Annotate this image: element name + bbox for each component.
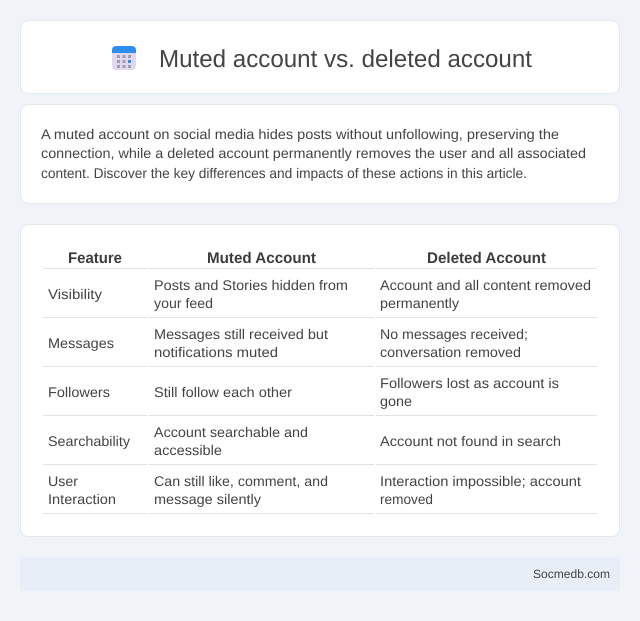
table header: Feature <box>68 250 122 267</box>
title: Muted account vs. deleted account <box>159 46 532 73</box>
row: visibility: permanently <box>380 295 459 311</box>
row: followers: gone <box>380 393 412 409</box>
footer credit: Socmedb.com <box>533 567 610 581</box>
row: user interaction: Interaction <box>48 491 116 507</box>
row: messages: notifications muted <box>154 344 278 360</box>
row: followers <box>48 375 559 409</box>
row: searchability <box>48 424 561 458</box>
row: user interaction <box>48 473 581 507</box>
row: followers: Still follow each other <box>154 384 292 400</box>
footer bar <box>20 557 620 591</box>
row: user interaction: message silently <box>154 491 261 507</box>
row: visibility: your feed <box>154 295 213 311</box>
icon: calendar <box>112 46 136 70</box>
row: messages: conversation removed <box>380 344 521 360</box>
row: visibility <box>48 277 591 311</box>
row: user interaction: User <box>48 473 78 489</box>
row: searchability: accessible <box>154 442 222 458</box>
table header <box>68 250 546 267</box>
row: user interaction: removed <box>380 491 433 507</box>
row: messages <box>48 326 528 360</box>
row: followers: Followers lost as account is <box>380 375 559 391</box>
row: messages: No messages received; <box>380 326 528 342</box>
row: searchability: Searchability <box>48 433 130 449</box>
intro text: connection, while a deleted account permanently removes the user and all associated <box>41 145 586 161</box>
row: messages: Messages still received but <box>154 326 328 342</box>
row: user interaction: Can still like, comment, and <box>154 473 328 489</box>
row: visibility: Posts and Stories hidden from <box>154 277 348 293</box>
table header: Deleted Account <box>427 250 546 267</box>
row: searchability: Account not found in search <box>380 433 561 449</box>
panel: title card <box>20 20 620 94</box>
table header: Muted Account <box>207 250 316 267</box>
intro text: content. Discover the key differences and impacts of these actions in this article. <box>41 165 527 181</box>
panel: introduction <box>20 104 620 204</box>
row: messages: Messages <box>48 335 114 351</box>
intro text: A muted account on social media hides posts without unfollowing, preserving the <box>41 126 559 142</box>
row: visibility: Account and all content removed <box>380 277 591 293</box>
row: visibility: Visibility <box>48 286 102 302</box>
row: searchability: Account searchable and <box>154 424 308 440</box>
row: user interaction: Interaction impossible; account <box>380 473 581 489</box>
intro text <box>41 126 586 181</box>
panel: comparison table <box>20 224 620 536</box>
row: followers: Followers <box>48 384 110 400</box>
